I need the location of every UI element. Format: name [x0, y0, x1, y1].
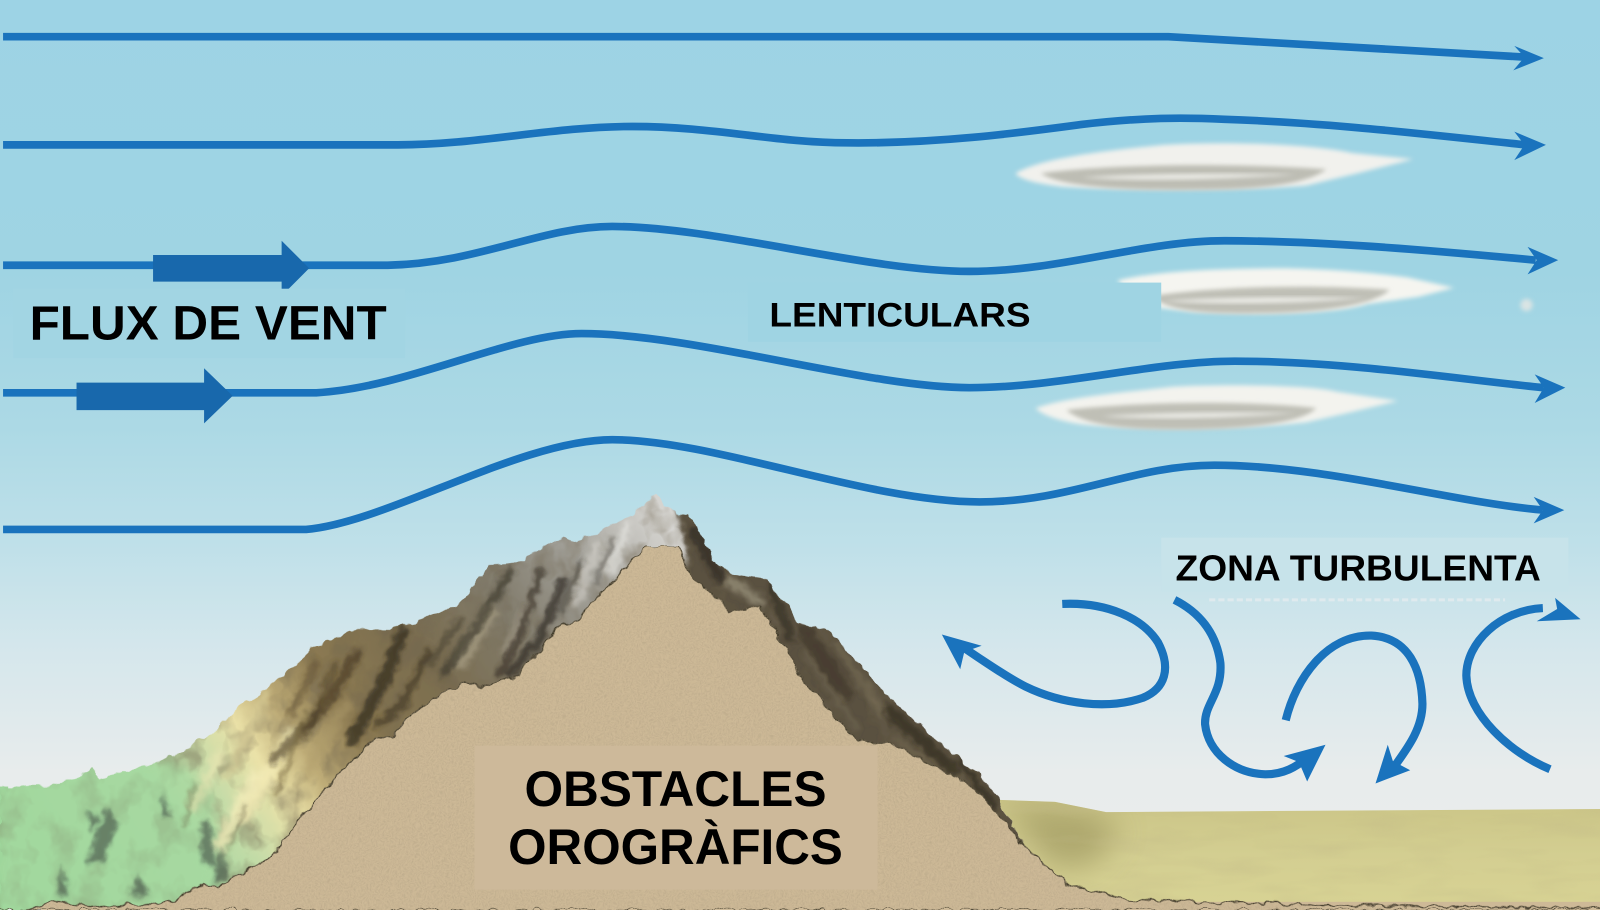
label: flux de vent: FLUX DE VENT: [30, 298, 387, 351]
label: flux de vent: [13, 289, 405, 358]
wind streamlines: [3, 37, 1565, 529]
label: lenticulars: LENTICULARS: [769, 296, 1031, 334]
block arrow upper: [153, 241, 309, 296]
cloud: middle lenticular: [1117, 268, 1533, 314]
turbulent arrow b: [1174, 600, 1326, 781]
turbulent arrow a: [942, 604, 1165, 704]
streamline 2: [3, 118, 1546, 160]
block arrow lower: [77, 368, 233, 423]
plain: leeward ground: [1000, 800, 1600, 902]
label: zona turbulenta: [1161, 538, 1568, 592]
turbulence arrows: [942, 598, 1581, 783]
cloud: upper lenticular: [1015, 143, 1413, 190]
lenticular clouds: [1015, 143, 1533, 429]
mountain: cross-section: [0, 547, 1600, 910]
label: obstacles orogràfics: [474, 746, 878, 890]
label: obstacles orogràfics: OROGRÀFICS: [508, 819, 843, 875]
mountain: textured slope: [0, 490, 1112, 910]
label: zona turbulenta: ZONA TURBULENTA: [1176, 548, 1541, 588]
label: lenticulars: [748, 283, 1161, 342]
streamline 1: [3, 37, 1544, 70]
wind direction block arrows: [77, 241, 309, 423]
streamline 5: [3, 440, 1564, 529]
streamline 4: [3, 334, 1565, 403]
cloud: lower lenticular: [1036, 385, 1398, 429]
mountain: green slope dark patches: [57, 791, 231, 896]
mountain: mottling: [0, 490, 1020, 910]
turbulent arrow d: [1466, 598, 1581, 769]
mountain: relief and cross-section: [0, 490, 1600, 910]
mountain: light ridge streaks: [194, 525, 964, 847]
mountain: dark ridge streaks: [184, 530, 995, 847]
label: obstacles orogràfics: OBSTACLES: [524, 761, 827, 817]
mountain: lower green wash: [0, 760, 219, 910]
stray cloud puff: [1520, 299, 1533, 311]
ground underlay strip: [0, 787, 1600, 910]
streamline 3: [3, 226, 1558, 274]
turbulent arrow c: [1286, 636, 1422, 783]
mountain: leeward dark face: [672, 510, 1024, 843]
